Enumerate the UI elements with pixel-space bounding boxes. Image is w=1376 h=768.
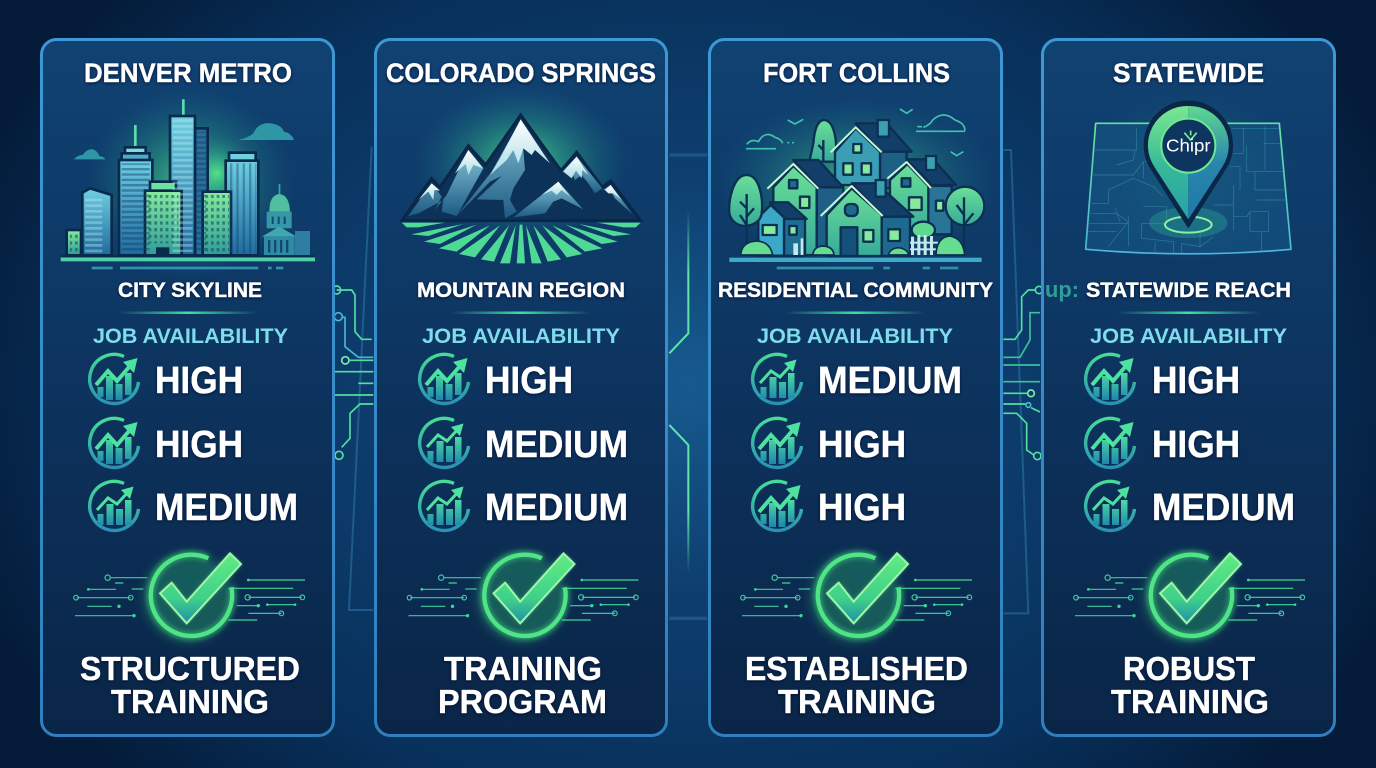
rating row 1 — [1086, 354, 1240, 403]
training label: STRUCTURED — [80, 650, 300, 687]
rating row 3: MEDIUM — [155, 487, 298, 529]
panel: Denver Metro — [42, 40, 334, 736]
rating row 3 — [90, 481, 298, 530]
panel card — [42, 40, 334, 736]
training label: PROGRAM — [438, 683, 607, 720]
rating row 2 — [420, 418, 628, 467]
heading: DENVER METRO — [84, 58, 292, 88]
circuit connector: Denver to Colorado Springs — [333, 147, 373, 610]
icon: check mark — [1074, 552, 1305, 642]
icon: check mark — [74, 552, 305, 642]
label: job availability: JOB AVAILABILITY — [93, 325, 288, 348]
label: job availability: JOB AVAILABILITY — [757, 325, 953, 348]
heading: STATEWIDE — [1113, 58, 1264, 88]
training label: ROBUST — [1123, 650, 1255, 687]
heading: COLORADO SPRINGS — [386, 58, 656, 88]
rating row 3 — [420, 481, 628, 530]
panel card — [710, 40, 1002, 736]
illustration: map with location pin: Chipr — [1166, 136, 1211, 156]
rating row 3 — [753, 481, 906, 530]
subtitle: RESIDENTIAL COMMUNITY — [718, 279, 993, 302]
rating row 2: HIGH — [155, 424, 243, 466]
panel: Statewide — [1042, 40, 1334, 736]
subtitle: CITY SKYLINE — [118, 279, 262, 302]
icon: check mark — [741, 552, 972, 642]
rating row 1 — [420, 354, 573, 403]
panel card — [1042, 40, 1334, 736]
training label — [80, 650, 300, 720]
label: job availability: JOB AVAILABILITY — [422, 325, 620, 348]
panel: Fort Collins — [710, 40, 1002, 736]
subtitle: STATEWIDE REACH — [1086, 279, 1291, 302]
rating row 3: MEDIUM — [485, 487, 628, 529]
rating row 2: HIGH — [818, 424, 906, 466]
rating row 1: HIGH — [155, 360, 243, 402]
training label — [745, 650, 968, 720]
rating row 2: HIGH — [1152, 424, 1240, 466]
icon: check mark — [407, 552, 638, 642]
heading: FORT COLLINS — [763, 58, 950, 88]
training label: TRAINING — [778, 683, 936, 720]
training label — [1111, 650, 1269, 720]
illustration: city skyline — [61, 87, 315, 280]
rating row 3: HIGH — [818, 487, 906, 529]
rating row 1: HIGH — [485, 360, 573, 402]
rating row 2 — [1086, 418, 1240, 467]
subtitle: MOUNTAIN REGION — [417, 279, 625, 302]
rating row 1: HIGH — [1152, 360, 1240, 402]
rating row 3: MEDIUM — [1152, 487, 1295, 529]
illustration: map with location pin — [1082, 90, 1295, 263]
illustration: houses — [717, 97, 997, 270]
label: job availability: JOB AVAILABILITY — [1090, 325, 1287, 348]
rating row 2 — [90, 418, 243, 467]
training label: TRAINING — [1111, 683, 1269, 720]
training label: TRAINING — [111, 683, 269, 720]
training label: TRAINING — [444, 650, 602, 687]
circuit connector: Fort Collins to Statewide — [1003, 150, 1043, 613]
training label: ESTABLISHED — [745, 650, 968, 687]
panel: Colorado Springs — [376, 40, 666, 736]
panel card — [376, 40, 666, 736]
rating row 1: MEDIUM — [818, 360, 962, 402]
training label — [438, 650, 607, 720]
rating row 2 — [753, 418, 906, 467]
rating row 3 — [1086, 481, 1295, 530]
rating row 2: MEDIUM — [485, 424, 628, 466]
stray label fragment: up: — [1045, 277, 1079, 302]
illustration: mountains — [402, 85, 641, 263]
rating row 1 — [90, 354, 243, 403]
rating row 1 — [753, 354, 962, 403]
circuit connector: Colorado Springs to Fort Collins — [669, 155, 707, 618]
